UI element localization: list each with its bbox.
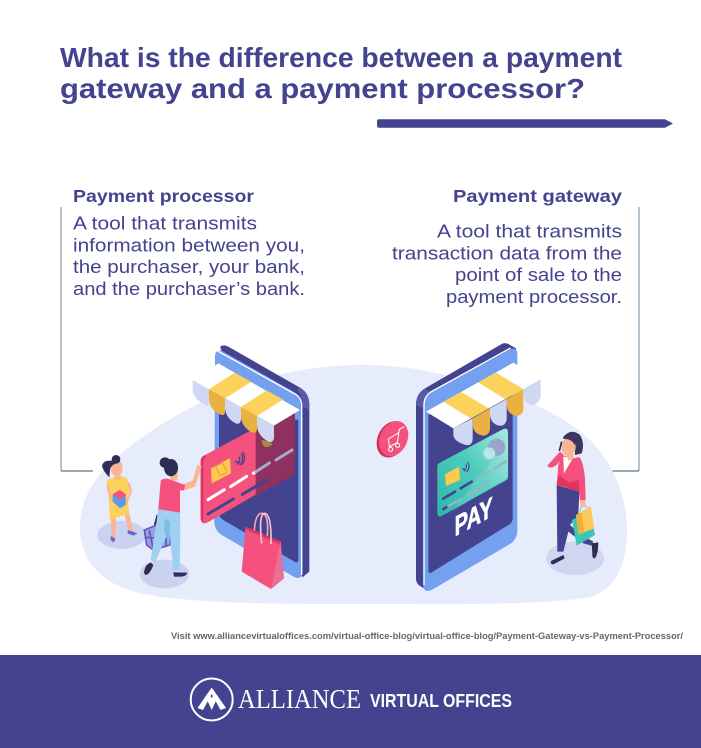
title underline arrow bar (377, 119, 673, 128)
text block: payment processor: and the purchaser’s bank. (73, 278, 305, 299)
text block: payment gateway: payment processor. (446, 286, 622, 307)
text block: payment gateway: A tool that transmits (437, 220, 622, 242)
text block: payment processor: the purchaser, your bank, (73, 256, 305, 277)
phone body left (214, 345, 309, 578)
title: What is the difference between a payment (60, 42, 622, 73)
title (60, 42, 622, 104)
woman at card (140, 457, 202, 588)
logo tagline: VIRTUAL OFFICES (370, 690, 512, 711)
footer band (0, 655, 701, 748)
text block: payment processor: information between you, (73, 234, 305, 256)
connector line: payment processor (61, 207, 93, 471)
text block: payment gateway (392, 186, 622, 307)
cart badge (371, 416, 414, 462)
awning left (193, 363, 300, 442)
logo mark (191, 678, 233, 720)
shopping card left (201, 407, 295, 523)
source link text: Visit www.alliancevirtualoffices.com/virtual-office-blog/virtual-office-blog/Payment-Gateway-vs-Payment-Processor/ (171, 631, 684, 641)
phone body right (416, 343, 517, 591)
logo (191, 678, 512, 720)
logo wordmark: ALLIANCE (238, 684, 361, 714)
background blob (80, 365, 627, 604)
text block: payment gateway: Payment gateway (453, 186, 622, 206)
shopping bag (242, 513, 284, 589)
girl with gift (97, 455, 202, 588)
text block: payment gateway: transaction data from the (392, 242, 622, 264)
PAY label: PAY (455, 492, 493, 543)
text block: payment processor: A tool that transmits (73, 212, 257, 234)
text block: payment processor (73, 186, 305, 299)
illustration: left phone shop (97, 345, 309, 589)
title: gateway and a payment processor? (60, 73, 585, 104)
teal card (437, 429, 508, 517)
text block: payment gateway: point of sale to the (455, 264, 622, 285)
illustration: right phone pay (371, 343, 604, 591)
awning right (426, 363, 541, 445)
text block: payment processor: Payment processor (73, 186, 254, 206)
woman with phone and bags (546, 432, 604, 575)
connector line: payment gateway (608, 207, 639, 471)
